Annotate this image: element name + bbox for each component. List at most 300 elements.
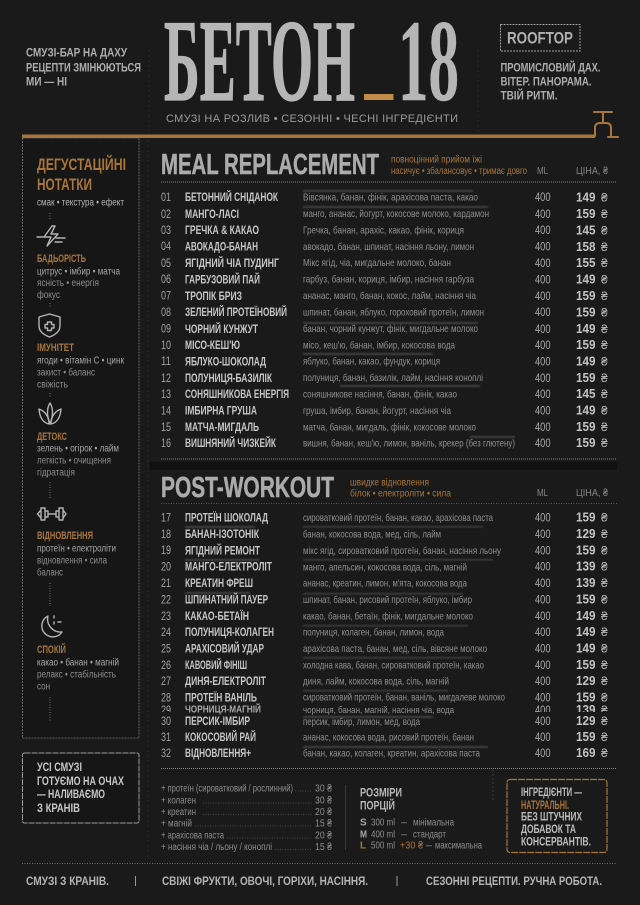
row 32: 400	[535, 748, 550, 760]
row 01: Вівсянка, банан, фінік, арахісова паста, какао	[303, 192, 478, 204]
row 31: 31	[161, 732, 171, 744]
header left text	[26, 46, 141, 88]
row 07: ТРОПІК БРИЗ	[185, 291, 242, 303]
row 30	[161, 713, 608, 728]
add-ons list: 30 ₴	[315, 784, 332, 794]
note: recovery: протеїн • електроліти	[37, 544, 116, 554]
icon: faucet	[594, 112, 618, 137]
row 20: 400	[535, 562, 550, 574]
portion sizes: —	[401, 818, 407, 828]
row 09: банан, чорний кунжут, фінік, мигдальне молоко	[303, 323, 478, 335]
row 32	[161, 745, 608, 760]
row 05	[161, 255, 608, 270]
row 31: ананас, кокосова вода, рисовий протеїн, банан	[303, 732, 474, 744]
row 08: 08	[161, 307, 171, 319]
tagline: СМУЗІ НА РОЗЛИВ • СЕЗОННІ • ЧЕСНІ ІНГРЕДІЄНТИ	[166, 113, 458, 125]
row 31: ₴	[601, 730, 608, 744]
row 32: ₴	[601, 746, 608, 760]
row 27: диня, лайм, кокосова вода, сіль, магній	[303, 676, 449, 688]
row 08	[161, 304, 608, 320]
row 12: 400	[535, 373, 550, 385]
row 03: Гречка, банан, арахіс, какао, фінік, кориця	[303, 224, 464, 236]
note: energy	[37, 253, 120, 301]
row 29: ₴	[601, 703, 608, 717]
note: immunity: ягоди • вітамін С • цинк	[37, 356, 124, 366]
row 05: Мікс ягід, чіа, мигдальне молоко, банан	[303, 257, 451, 269]
row 15: 15	[161, 422, 171, 434]
row 20	[161, 558, 608, 574]
row 06: 400	[535, 274, 550, 286]
header left text: МИ — НІ	[26, 74, 67, 88]
row 08: шпинат, банан, яблуко, гороховий протеїн, лимон	[303, 306, 484, 318]
row 03: ₴	[601, 224, 608, 238]
row 14	[161, 402, 608, 418]
row 12: ПОЛУНИЦЯ-БАЗИЛІК	[185, 373, 273, 385]
row 17	[161, 510, 608, 524]
section heading: post-workout: білок • електроліти • сила	[350, 488, 451, 500]
row 30: 30	[161, 716, 171, 728]
portion sizes: 400 ml	[371, 830, 395, 840]
row 07	[161, 288, 608, 303]
callout: natural ingredients: ІНГРЕДІЄНТИ —	[521, 787, 582, 799]
heading: tasting notes	[37, 155, 126, 208]
row 24: ₴	[601, 625, 608, 639]
portion sizes: ПОРЦІЙ	[360, 798, 395, 812]
row 06	[161, 272, 608, 286]
row 18: 400	[535, 529, 550, 541]
row 28: 400	[535, 692, 550, 704]
row 16: 159	[576, 435, 596, 450]
row 10: 400	[535, 340, 550, 352]
row 05: ₴	[601, 256, 608, 270]
row 04: ₴	[601, 240, 608, 254]
row 02: 02	[161, 209, 171, 221]
note: immunity	[37, 342, 124, 390]
row 04: авокадо, банан, шпинат, насіння льону, лимон	[303, 241, 474, 253]
row 09: 09	[161, 324, 171, 336]
row 13: 145	[576, 386, 596, 401]
note: recovery: відновлення • сила	[37, 556, 107, 566]
row 11: 400	[535, 356, 550, 368]
add-ons list: + протеїн (сироватковий / рослинний)	[161, 784, 293, 794]
row 11: ЯБЛУКО-ШОКОЛАД	[185, 356, 266, 368]
portion sizes: L	[360, 840, 366, 852]
row 02: 159	[576, 206, 596, 221]
row 02: 400	[535, 209, 550, 221]
row 13	[161, 386, 608, 401]
section heading: post-workout	[161, 472, 608, 504]
row 24	[161, 624, 608, 639]
row 23: ₴	[601, 609, 608, 623]
portion sizes: стандарт	[413, 830, 446, 840]
row 23	[161, 608, 608, 623]
row 11	[161, 354, 608, 368]
row 23: какао, банан, бетаїн, фінік, мигдальне молоко	[303, 610, 473, 622]
callout: made to order: — НАЛИВАЄМО	[37, 789, 105, 801]
row 16	[161, 435, 608, 450]
row 19	[161, 542, 608, 558]
row 10	[161, 337, 608, 352]
portion sizes: —	[426, 840, 432, 852]
row 15: ₴	[601, 420, 608, 434]
row 13: ₴	[601, 387, 608, 401]
row 17: 400	[535, 512, 550, 524]
row 10: 10	[161, 340, 171, 352]
rooftop badge	[500, 24, 580, 51]
row 32: 169	[576, 745, 596, 760]
row 31: КОКОСОВИЙ РАЙ	[185, 731, 256, 744]
heading: tasting notes: смак • текстура • ефект	[37, 196, 124, 208]
portion sizes: 500 ml	[371, 840, 395, 852]
row 03: ГРЕЧКА & КАКАО	[185, 225, 259, 237]
row 09: 400	[535, 324, 550, 336]
section heading: meal replacement: MEAL REPLACEMENT	[161, 149, 379, 181]
row 14: ІМБИРНА ГРУША	[185, 406, 257, 418]
row 26: 400	[535, 660, 550, 672]
row 12: 159	[576, 370, 596, 385]
row 25: 400	[535, 644, 550, 656]
row 08: 400	[535, 307, 550, 319]
row 19: 19	[161, 545, 171, 557]
row 10: місо, кеш'ю, банан, імбир, кокосова вода	[303, 340, 455, 352]
row 21: КРЕАТИН ФРЕШ	[185, 578, 253, 590]
row 17: сироватковий протеїн, банан, какао, арахісова паста	[303, 512, 493, 524]
row 16: ₴	[601, 436, 608, 450]
menu table: post-workout	[161, 510, 608, 760]
heading: tasting notes: НОТАТКИ	[37, 175, 92, 194]
row 10: 159	[576, 337, 596, 352]
note: detox	[37, 431, 119, 478]
row 21: ₴	[601, 576, 608, 590]
row 21: 400	[535, 578, 550, 590]
row 31: 159	[576, 729, 596, 744]
row 23: КАКАО-БЕТАЇН	[185, 610, 249, 623]
row 27: 129	[576, 673, 596, 688]
row 21: 21	[161, 578, 171, 590]
row 27: ₴	[601, 674, 608, 688]
note: detox: гідратація	[37, 468, 75, 478]
footer strip: СМУЗІ З КРАНІВ.	[26, 874, 109, 888]
section heading: post-workout: швидке відновлення	[350, 478, 429, 488]
row 26: 26	[161, 660, 171, 672]
callout: natural ingredients: БЕЗ ШТУЧНИХ	[521, 812, 582, 824]
row 16: 400	[535, 438, 550, 450]
note: immunity: ІМУНІТЕТ	[37, 342, 74, 354]
row 26: ₴	[601, 658, 608, 672]
row 23: 23	[161, 611, 171, 623]
row 11: 149	[576, 354, 596, 368]
row 29: 29	[161, 705, 171, 717]
row 01: 01	[161, 192, 171, 204]
footer strip: СЕЗОННІ РЕЦЕПТИ. РУЧНА РОБОТА.	[426, 874, 602, 888]
row 24: полуниця, колаген, банан, лимон, вода	[303, 626, 444, 638]
header right text: ТВІЙ РИТМ.	[500, 88, 558, 102]
portion sizes: +30 ₴	[400, 840, 423, 852]
footer strip	[26, 874, 602, 888]
section heading: post-workout: POST-WORKOUT	[161, 472, 334, 504]
row 05: 05	[161, 258, 171, 270]
title: 18	[398, 0, 459, 126]
row 30: ПЕРСИК-ІМБИР	[185, 716, 250, 728]
row 19: ₴	[601, 544, 608, 558]
row 24: 149	[576, 624, 596, 639]
row 02: МАНГО-ЛАСІ	[185, 209, 239, 221]
add-ons list: + колаген	[161, 796, 196, 806]
add-ons list: 15 ₴	[315, 842, 332, 853]
row 09	[161, 321, 608, 336]
row 18: БАНАН-ІЗОТОНІК	[185, 529, 260, 541]
row 27: 400	[535, 676, 550, 688]
row 10: МІСО-КЕШ'Ю	[185, 340, 240, 352]
portion sizes: максимальна	[435, 840, 482, 852]
row 03: 03	[161, 225, 171, 237]
rooftop badge: ROOFTOP	[507, 28, 573, 48]
row 27: 27	[161, 676, 171, 688]
row 18: 18	[161, 529, 171, 541]
add-ons list: 20 ₴	[315, 807, 332, 818]
section heading: meal replacement: ЦІНА, ₴	[576, 166, 608, 177]
row 07: 07	[161, 290, 171, 302]
portion sizes: 300 ml	[371, 818, 395, 828]
row 28: 159	[576, 690, 596, 704]
row 01: 400	[535, 192, 550, 204]
row 08: ₴	[601, 306, 608, 320]
note: energy: БАДЬОРІСТЬ	[37, 253, 86, 265]
row 01: БЕТОННИЙ СНІДАНОК	[185, 191, 279, 204]
section heading: post-workout: ЦІНА, ₴	[576, 488, 608, 499]
note: recovery	[37, 530, 116, 578]
row 18	[161, 526, 608, 541]
note: immunity: свіжість	[37, 380, 68, 390]
row 32: ВІДНОВЛЕННЯ+	[185, 748, 251, 760]
row 06: 06	[161, 274, 171, 286]
portion sizes: РОЗМІРИ	[360, 786, 402, 800]
row 13: 400	[535, 389, 550, 401]
callout: made to order	[22, 753, 139, 823]
note: calm: релакс • стабільність	[37, 668, 116, 680]
add-ons list: + насіння чіа / льону / коноплі	[161, 842, 272, 853]
add-ons list	[161, 784, 332, 853]
note: detox: зелень • огірок • лайм	[37, 444, 119, 454]
row 13: соняшникове насіння, банан, фінік, какао	[303, 388, 457, 400]
add-ons list: + арахісова паста	[161, 830, 224, 842]
icon: leaf	[39, 403, 61, 424]
add-ons list: 30 ₴	[315, 796, 332, 806]
section heading: meal replacement: повноцінний прийом їжі	[391, 154, 482, 166]
row 03: 400	[535, 225, 550, 237]
row 16: ВИШНЯНИЙ ЧИЗКЕЙК	[185, 437, 277, 450]
header right text	[500, 60, 600, 102]
row 24: ПОЛУНИЦЯ-КОЛАГЕН	[185, 627, 274, 639]
row 26: холодна кава, банан, сироватковий протеїн, какао	[303, 660, 484, 672]
row 15	[161, 419, 608, 434]
row 06: гарбуз, банан, кориця, імбир, насіння гарбуза	[303, 274, 474, 286]
row 02: манго, ананас, йогурт, кокосове молоко, кардамон	[303, 208, 489, 220]
header right text: ПРОМИСЛОВИЙ ДАХ.	[500, 60, 600, 74]
row 29: ЧОРНИЦЯ-МАГНІЙ	[185, 702, 261, 716]
row 22: 159	[576, 592, 596, 606]
portion sizes: M	[360, 830, 367, 840]
row 22: шпинат, банан, рисовий протеїн, яблуко, імбир	[303, 594, 472, 606]
callout: natural ingredients: НАТУРАЛЬНІ.	[521, 800, 569, 812]
row 23: 149	[576, 608, 596, 623]
row 26: КАВОВИЙ ФІНІШ	[185, 659, 247, 672]
add-ons list: + креатин	[161, 807, 196, 818]
note: energy: ясність • енергія	[37, 278, 99, 289]
row 24: 400	[535, 627, 550, 639]
row 08: 159	[576, 304, 596, 320]
callout: made to order: ГОТУЄМО НА ОЧАХ	[37, 776, 124, 788]
menu table: meal replacement	[161, 190, 608, 450]
row 05: 400	[535, 258, 550, 270]
row 22: ШПИНАТНИЙ ПАУЕР	[185, 594, 268, 606]
heading: tasting notes: ДЕГУСТАЦІЙНІ	[37, 155, 126, 174]
row 15: матча, банан, мигдаль, фінік, кокосове молоко	[303, 422, 476, 434]
row 25	[161, 640, 608, 656]
row 19: 159	[576, 542, 596, 558]
row 11: ₴	[601, 354, 608, 368]
note: energy: фокус	[37, 289, 60, 301]
row 12: полуниця, банан, базилік, лайм, насіння коноплі	[303, 372, 483, 384]
row 03: 145	[576, 222, 596, 238]
row 12: ₴	[601, 371, 608, 385]
row 28: 28	[161, 692, 171, 704]
portion sizes: мінімальна	[413, 818, 454, 828]
row 30: 400	[535, 716, 550, 728]
row 25: ₴	[601, 642, 608, 656]
row 04: 158	[576, 239, 596, 254]
row 17: 17	[161, 512, 171, 524]
row 16: 16	[161, 438, 171, 450]
note: energy: цитрус • імбир • матча	[37, 266, 120, 278]
row 15: 400	[535, 422, 550, 434]
row 26	[161, 657, 608, 672]
callout: made to order: З КРАНІВ	[37, 803, 80, 815]
row 28: ПРОТЕЇН ВАНІЛЬ	[185, 692, 257, 704]
row 07: 400	[535, 291, 550, 303]
header right text: ВІТЕР. ПАНОРАМА.	[500, 74, 592, 88]
orange pipe	[22, 134, 595, 138]
row 32: 32	[161, 748, 171, 760]
portion sizes: S	[360, 818, 367, 828]
header left text: РЕЦЕПТИ ЗМІНЮЮТЬСЯ	[26, 60, 141, 74]
row 29	[162, 703, 608, 715]
row 04: 04	[161, 241, 171, 253]
row 12	[161, 370, 608, 385]
row 28: сироватковий протеїн, банан, ваніль, мигдалеве молоко	[303, 692, 505, 704]
row 18: банан, кокосова вода, мед, сіль, лайм	[303, 528, 441, 540]
callout: natural ingredients	[507, 780, 607, 852]
row 21: 139	[576, 575, 596, 590]
add-ons list: 15 ₴	[315, 818, 332, 830]
row 01: 149	[576, 190, 596, 204]
title: БЕТОН	[164, 0, 355, 126]
portion sizes: —	[401, 830, 407, 840]
row 06: 149	[576, 272, 596, 286]
row 22: ₴	[601, 592, 608, 606]
row 30: 129	[576, 713, 596, 728]
row 20: ₴	[601, 560, 608, 574]
note: detox: ДЕТОКС	[37, 431, 67, 443]
row 02: ₴	[601, 207, 608, 221]
callout: made to order: УСІ СМУЗІ	[37, 762, 82, 774]
portion sizes	[360, 786, 482, 852]
note: recovery: ВІДНОВЛЕННЯ	[37, 530, 93, 542]
row 31	[161, 729, 608, 744]
panel: tasting notes	[22, 138, 139, 738]
row 09: ЧОРНИЙ КУНЖУТ	[185, 323, 258, 336]
row 19: 400	[535, 546, 550, 558]
row 24: 24	[161, 627, 171, 639]
row 21	[161, 575, 608, 590]
row 27	[161, 673, 608, 688]
row 14: 400	[535, 406, 550, 418]
row 13: СОНЯШНИКОВА ЕНЕРГІЯ	[185, 389, 289, 401]
row 25: арахісова паста, банан, мед, сіль, вівсяне молоко	[303, 643, 487, 655]
row 17: 159	[576, 510, 596, 524]
add-ons list: 20 ₴	[315, 830, 332, 842]
row 11: 11	[161, 356, 171, 368]
row 22	[161, 592, 608, 606]
row 10: ₴	[601, 338, 608, 352]
row 17: ₴	[601, 510, 608, 524]
row 14: груша, імбир, банан, йогурт, насіння чіа	[303, 405, 451, 417]
row 07: ₴	[601, 289, 608, 303]
footer strip: СВІЖІ ФРУКТИ, ОВОЧІ, ГОРІХИ, НАСІННЯ.	[162, 874, 368, 888]
note: calm: СПОКІЙ	[37, 643, 66, 656]
row 27: ДИНЯ-ЕЛЕКТРОЛІТ	[185, 676, 266, 688]
note: detox: легкість • очищення	[37, 456, 111, 466]
row 05: 155	[576, 255, 596, 270]
row 05: ЯГІДНИЙ ЧІА ПУДИНГ	[185, 257, 279, 270]
row 01: ₴	[601, 190, 608, 204]
row 29: чорниця, банан, магній, насіння чіа, вода	[303, 705, 454, 715]
row 19: мікс ягід, сироватковий протеїн, банан, насіння льону	[303, 545, 502, 557]
row 04	[161, 239, 608, 254]
section heading: post-workout: ML	[537, 488, 548, 499]
note: calm	[37, 643, 119, 692]
row 28: ₴	[601, 690, 608, 704]
icon: shield	[39, 314, 60, 337]
row 26: 159	[576, 657, 596, 672]
row 02	[161, 206, 608, 221]
row 25: 25	[161, 644, 171, 656]
note: calm: какао • банан • магній	[37, 656, 119, 668]
row 31: 400	[535, 732, 550, 744]
row 15: 159	[576, 419, 596, 434]
row 06: ГАРБУЗОВИЙ ПАЙ	[185, 274, 260, 286]
row 16: вишня, банан, кеш'ю, лимон, ваніль, крекер (без глютену)	[303, 438, 515, 450]
row 20: 139	[576, 558, 596, 574]
row 14: 14	[161, 406, 171, 418]
row 20: 20	[161, 562, 171, 574]
note: immunity: закист • баланс	[37, 366, 95, 378]
row 30: персик, імбир, лимон, мед, вода	[303, 716, 420, 728]
note: calm: сон	[37, 682, 50, 692]
row 18: ₴	[601, 527, 608, 541]
row 13: 13	[161, 389, 171, 401]
row 17: ПРОТЕЇН ШОКОЛАД	[185, 512, 268, 524]
row 18: 129	[576, 526, 596, 541]
callout: natural ingredients: ДОБАВОК ТА	[521, 824, 576, 836]
section heading: meal replacement: ML	[537, 166, 548, 177]
row 01	[161, 190, 608, 204]
row 07: 159	[576, 288, 596, 303]
row 09: ₴	[601, 322, 608, 336]
row 07: ананас, манго, банан, кокос, лайм, насіння чіа	[303, 290, 476, 302]
icon: bolt	[37, 226, 65, 246]
row 25: 149	[576, 640, 596, 656]
